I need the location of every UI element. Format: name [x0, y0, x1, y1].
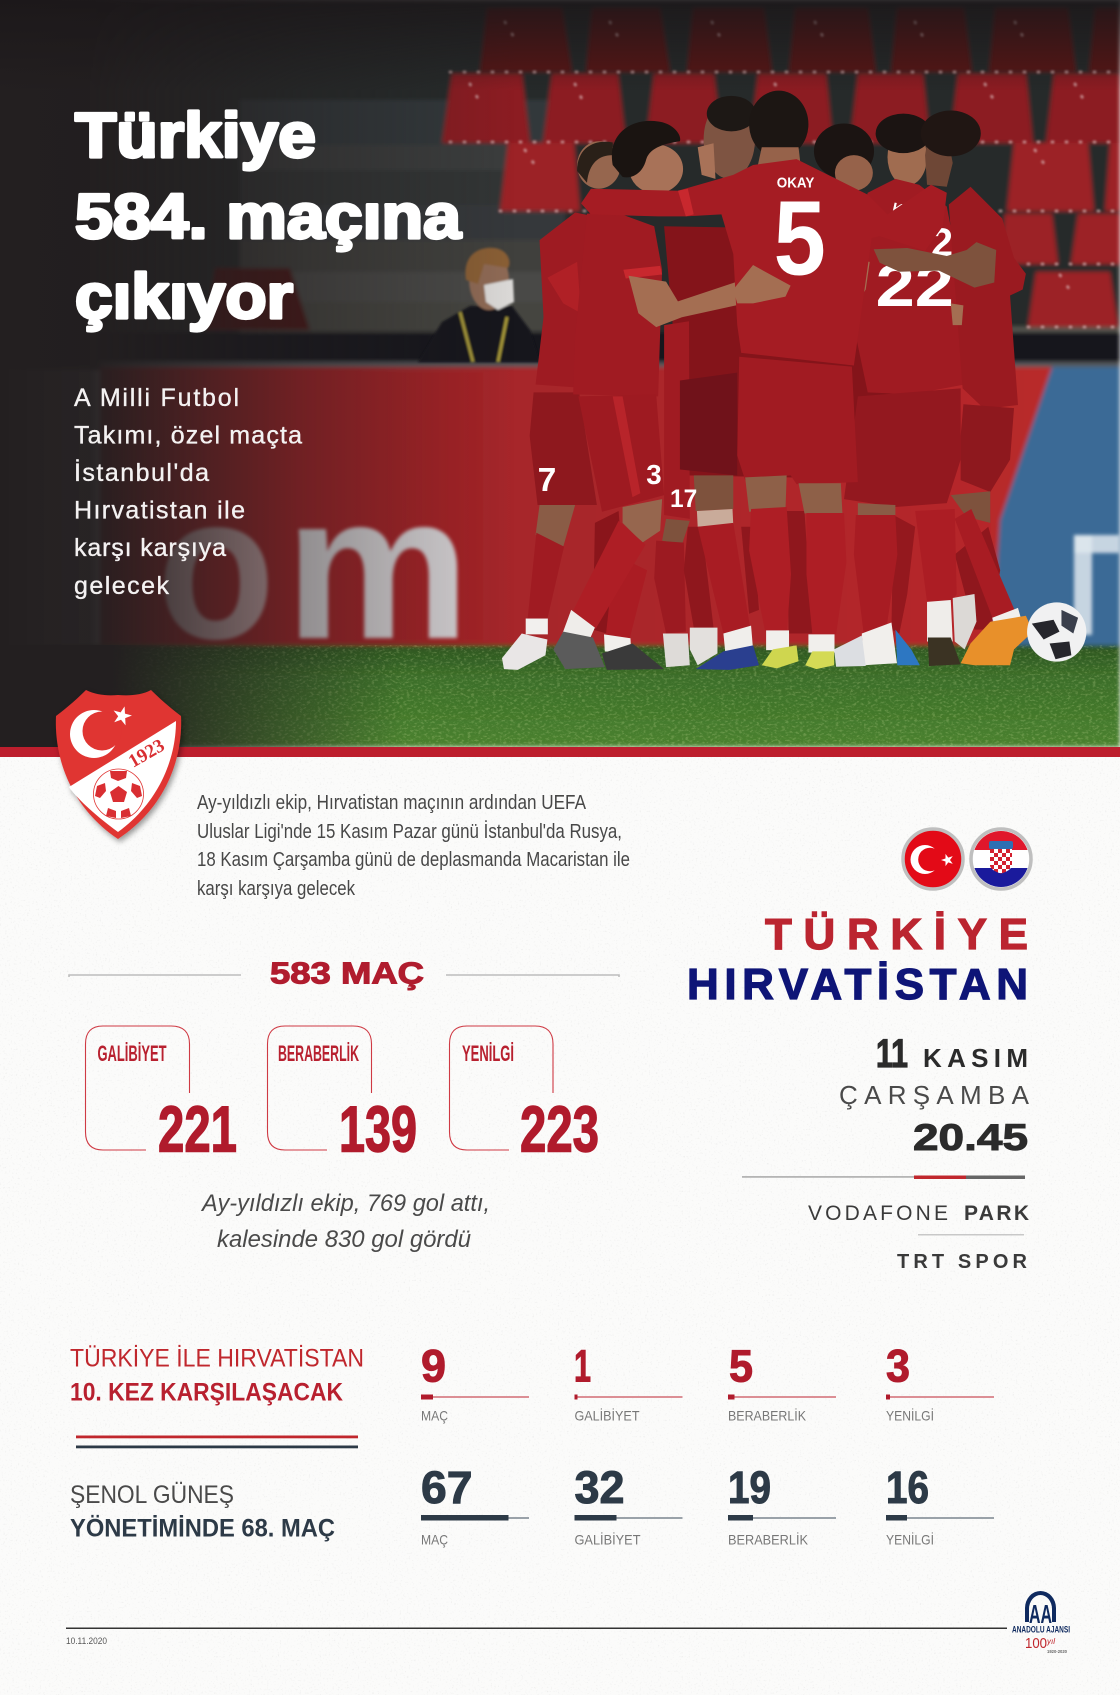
player number 5: 5 — [774, 180, 826, 298]
player number 22: 22 — [876, 252, 954, 319]
player number 22: 2 — [931, 221, 953, 265]
stat: 5 beraberlik — [728, 1341, 836, 1424]
banner lettering: m — [285, 452, 470, 682]
text block: intro paragraph — [197, 792, 630, 900]
stat: 5 beraberlik: 5 — [729, 1341, 753, 1392]
title — [75, 101, 462, 332]
left dark fade — [0, 0, 489, 645]
card: galibiyet: 221 — [158, 1092, 237, 1166]
text block: goals — [200, 1190, 490, 1253]
stat: 16 yenilgi: YENİLGİ — [886, 1531, 934, 1548]
stat: 1 galibiyet: 1 — [574, 1341, 591, 1392]
card: yenilgi: 223 — [520, 1092, 599, 1166]
stat: 32 galibiyet — [574, 1462, 682, 1548]
subtitle: gelecek — [74, 572, 170, 600]
stat: 67 maç: MAÇ — [421, 1532, 448, 1548]
stat: 19 beraberlik: 19 — [728, 1462, 771, 1513]
banner lettering: o — [157, 452, 275, 682]
top shade — [0, 0, 1120, 90]
banner lettering — [164, 524, 1120, 642]
subtitle — [74, 384, 302, 600]
heading: 583 MAÇ: 583 MAÇ — [270, 956, 424, 990]
icon: TFF shield logo — [56, 690, 181, 839]
stats row: coach — [421, 1462, 994, 1548]
stat: 67 maç — [421, 1462, 529, 1548]
card: yenilgi — [450, 1026, 599, 1166]
match date and time: 11 — [876, 1032, 908, 1076]
stat: 1 galibiyet — [574, 1341, 682, 1424]
stat: 3 yenilgi: 3 — [886, 1341, 910, 1392]
text block: goals: Ay-yıldızlı ekip, 769 gol attı, — [200, 1190, 490, 1217]
text block: intro paragraph: Uluslar Ligi'nde 15 Kasım Pazar günü İstanbul'da Rusya, — [197, 820, 622, 843]
subtitle: A Milli Futbol — [74, 384, 239, 412]
stat: 9 maç: MAÇ — [421, 1408, 448, 1424]
icon: Anadolu Ajansı logo — [1012, 1591, 1070, 1654]
stat: 32 galibiyet: GALİBİYET — [574, 1531, 641, 1548]
player number 3: 3 — [646, 459, 662, 490]
far left player 7 — [502, 141, 621, 670]
subtitle: İstanbul'da — [74, 458, 209, 487]
back body mass — [654, 96, 1000, 634]
subtitle: karşı karşıya — [74, 534, 226, 562]
icon: Croatian flag — [970, 829, 1032, 890]
card: galibiyet — [86, 1026, 237, 1166]
card: beraberlik: BERABERLİK — [278, 1041, 359, 1066]
player number 22 — [834, 114, 965, 667]
red divider bar — [0, 747, 1120, 757]
match date and time: 20.45 — [913, 1117, 1028, 1158]
stat: 3 yenilgi — [886, 1341, 994, 1424]
heading: teams: HIRVATİSTAN — [687, 960, 1028, 1009]
card: galibiyet: GALİBİYET — [98, 1041, 167, 1066]
card: yenilgi: YENİLGİ — [462, 1041, 514, 1066]
seat speckles — [450, 22, 1120, 327]
section heading: head to head: TÜRKİYE İLE HIRVATİSTAN — [70, 1344, 364, 1373]
heading: teams — [687, 910, 1028, 1009]
stat: 9 maç — [421, 1341, 529, 1424]
far right player — [864, 110, 1029, 666]
middle leg — [663, 509, 759, 670]
match date and time: KASIM — [923, 1043, 1028, 1073]
stat: 16 yenilgi — [886, 1462, 994, 1548]
text block: intro paragraph: 18 Kasım Çarşamba günü de deplasmanda Macaristan ile — [197, 849, 630, 871]
venue and broadcaster — [808, 1202, 1029, 1273]
player number 5 — [581, 91, 947, 669]
venue and broadcaster: TRT SPOR — [897, 1251, 1028, 1273]
text block: goals: kalesinde 830 gol gördü — [217, 1226, 471, 1253]
match date and time — [839, 1032, 1030, 1158]
player number 22: KA — [891, 200, 916, 221]
card: beraberlik — [268, 1026, 417, 1166]
stat: 1 galibiyet: GALİBİYET — [574, 1407, 640, 1424]
stat: 5 beraberlik: BERABERLİK — [728, 1407, 807, 1424]
stats row: head to head — [421, 1341, 994, 1424]
venue and broadcaster: VODAFONE — [808, 1202, 948, 1225]
players huddle — [502, 91, 1086, 670]
section heading: coach — [70, 1481, 335, 1543]
text block: intro paragraph: Ay-yıldızlı ekip, Hırvatistan maçının ardından UEFA — [197, 792, 587, 814]
section heading: coach: YÖNETİMİNDE 68. MAÇ — [70, 1514, 335, 1543]
text block: intro paragraph: karşı karşıya gelecek — [197, 878, 356, 900]
panel: hero photo — [0, 0, 1120, 747]
stat: 16 yenilgi: 16 — [886, 1462, 929, 1513]
stat: 67 maç: 67 — [421, 1462, 472, 1513]
subtitle: Hırvatistan ile — [74, 496, 245, 524]
stat: 32 galibiyet: 32 — [574, 1462, 624, 1513]
icon: Anadolu Ajansı logo: 100 — [1025, 1635, 1047, 1652]
icon: Anadolu Ajansı logo: ANADOLU AJANSI — [1012, 1624, 1070, 1636]
section heading: head to head: 10. KEZ KARŞILAŞACAK — [70, 1379, 343, 1407]
match ball — [1027, 602, 1086, 662]
icon: Anadolu Ajansı logo: AA — [1029, 1599, 1052, 1629]
subtitle: Takımı, özel maçta — [74, 422, 302, 450]
card: beraberlik: 139 — [339, 1092, 417, 1166]
section heading: head to head — [70, 1344, 364, 1407]
footer rule and date: 10.11.2020 — [66, 1636, 107, 1647]
icon: Turkish flag — [903, 829, 963, 889]
player number 3 — [554, 120, 736, 670]
title: çıkıyor — [75, 262, 293, 332]
icon: Anadolu Ajansı logo: yıl — [1046, 1637, 1055, 1646]
far left player 7: 7 — [538, 462, 556, 499]
steward — [418, 248, 540, 362]
player number 5: OKAY — [777, 175, 814, 192]
title: Türkiye — [75, 101, 316, 171]
icon: Anadolu Ajansı logo: 1920-2020 — [1047, 1649, 1067, 1654]
stat: 3 yenilgi: YENİLGİ — [886, 1407, 934, 1424]
venue and broadcaster: PARK — [964, 1202, 1029, 1225]
stat: 19 beraberlik — [728, 1462, 836, 1548]
stat: 9 maç: 9 — [421, 1341, 446, 1392]
section heading: coach: ŞENOL GÜNEŞ — [70, 1481, 234, 1509]
title: 584. maçına — [75, 182, 462, 252]
icon: TFF shield logo: 1923 — [125, 735, 168, 772]
player number 3: 17 — [670, 486, 697, 513]
stat: 19 beraberlik: BERABERLİK — [728, 1531, 809, 1548]
match date and time: ÇARŞAMBA — [839, 1080, 1030, 1110]
heading: teams: TÜRKİYE — [765, 910, 1028, 959]
